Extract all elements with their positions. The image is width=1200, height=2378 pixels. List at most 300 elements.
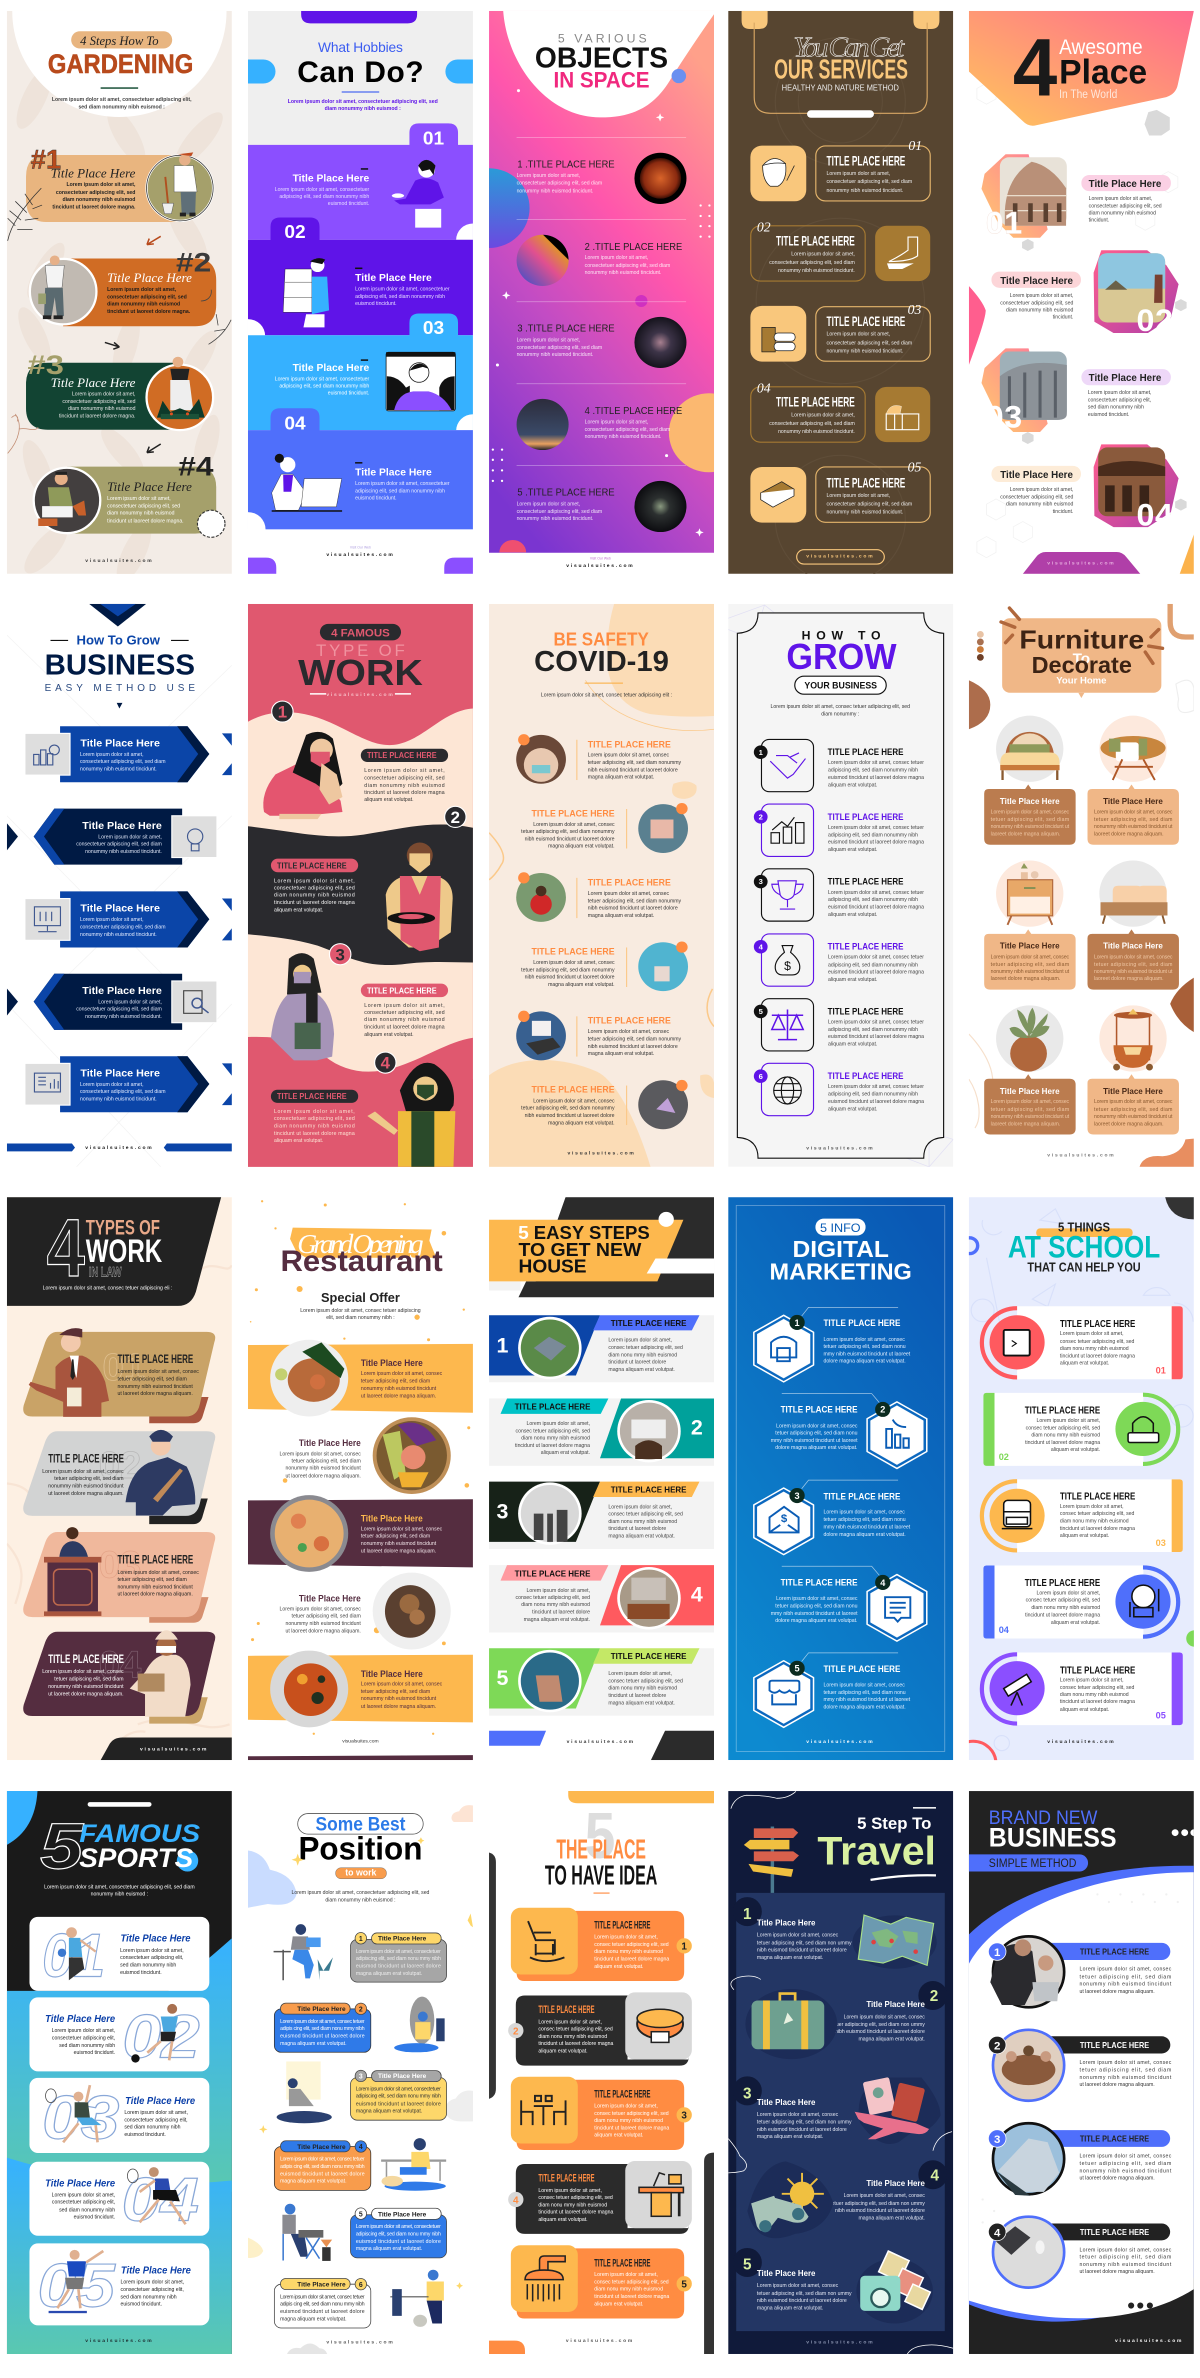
item 2: TITLE PLACE HERE — [277, 862, 347, 870]
sport 1: Lorem ipsum dolor sit amet, — [120, 1948, 184, 1954]
section 03: 03 — [423, 318, 444, 339]
heading: OBJECTS — [535, 43, 668, 75]
item 4 — [271, 1052, 455, 1167]
heading: COVID-19 — [534, 646, 669, 678]
heading — [1001, 608, 1162, 698]
item 2: Lorem ipsum dolor sit amet, — [274, 878, 355, 884]
place 01: consectetuer adipiscing elit, sed — [1089, 203, 1162, 209]
position 1: adipiscing elit, sed diam nonu mmy nibh — [356, 1956, 441, 1962]
step 4: tincidunt ut laoreet dolore — [532, 1610, 590, 1616]
section 04 — [248, 408, 473, 530]
heading — [280, 1228, 443, 1321]
step 1 — [733, 1897, 937, 1969]
panel: restaurant — [248, 1197, 473, 1760]
step 3 — [733, 2076, 941, 2144]
info 1: Lorem ipsum dolor sit amet, consec — [823, 1337, 905, 1343]
item 2 — [988, 2030, 1172, 2101]
sport 4: sed diam nonummy nibh — [59, 2207, 115, 2213]
dish 2: Lorem ipsum dolor sit amet, consec — [280, 1451, 361, 1457]
item 1: Lorem ipsum dolor sit amet, — [80, 752, 144, 758]
idea 5: diam nonu mmy nibh euismod — [594, 2287, 663, 2293]
idea 1: consec tetuer adipiscing elit, sed — [594, 1942, 669, 1948]
item 1: TITLE PLACE HERE — [828, 747, 903, 757]
step 1: 1 — [496, 1334, 509, 1358]
row 1: Lorem ipsum dolor sit amet, consec — [588, 753, 670, 759]
item 1: euismod tincidunt ut laoreet dolore magna — [828, 775, 924, 781]
idea 2: diam nonu mmy nibh euismod — [538, 2034, 607, 2040]
place 01: Title Place Here — [1089, 179, 1162, 190]
step 2: tincidunt ut laoreet dolore magna — [515, 1443, 590, 1449]
thing 4: TITLE PLACE HERE — [1025, 1578, 1100, 1589]
dish 4: Lorem ipsum dolor sit amet, consec — [280, 1606, 361, 1612]
section 01 — [248, 123, 473, 240]
panel: brand new business — [969, 1791, 1197, 2354]
item 4: 4 — [381, 1054, 391, 1073]
step 4: Title Place Here — [866, 2178, 925, 2188]
idea 5: consec tetuer adipiscing elit, sed — [594, 2279, 669, 2285]
heading — [489, 1197, 714, 1297]
item 3: Lorem ipsum dolor sit amet, — [364, 1003, 445, 1009]
heading — [771, 629, 910, 717]
type 3: Lorem ipsum dolor sit amet, consec — [117, 1570, 199, 1576]
thing 3 — [982, 1479, 1183, 1552]
position 6: 6 — [359, 2282, 363, 2289]
idea 5: aliquam erat volutpat. — [594, 2302, 643, 2308]
thing 5: TITLE PLACE HERE — [1060, 1666, 1135, 1676]
panel: our services — [728, 11, 953, 583]
heading — [45, 604, 195, 709]
place 02: Title Place Here — [1000, 276, 1073, 287]
item chair: laoreet dolore magna aliquam. — [1094, 831, 1164, 837]
thing 5: tincidunt ut laoreet dolore magna — [1060, 1699, 1135, 1705]
info 1: dolore magna aliquam erat volutpat. — [823, 1359, 906, 1365]
sport 2: euismod tincidunt. — [74, 2050, 115, 2056]
position 5: Title Place Here — [378, 2211, 427, 2218]
heading — [40, 1810, 200, 1898]
heading: EASY STEPS — [534, 1223, 650, 1244]
row 5: consectetuer adipiscing elit, sed diam — [517, 509, 602, 515]
item 3 — [271, 944, 448, 1060]
step 3: tetuer adipiscing elit, sed diam non ummy — [757, 2120, 852, 2126]
step 5: magna aliquam erat volutpat. — [608, 1700, 675, 1706]
step 4 — [489, 1565, 714, 1633]
panel: awesome place — [969, 11, 1194, 574]
item 3: TITLE PLACE HERE — [827, 314, 905, 329]
type 1: nonummy nibh euismod tincidunt — [117, 1384, 193, 1390]
item 3 — [750, 302, 930, 362]
item 1: tincidunt ut laoreet dolore magna — [364, 790, 445, 796]
idea 5: Lorem ipsum dolor sit amet, — [594, 2272, 658, 2278]
heading: 5 — [518, 1223, 529, 1244]
thing 1: aliquam erat volutpat. — [1060, 1361, 1109, 1367]
dish 2: ut laoreet dolore magna aliquam. — [286, 1474, 361, 1479]
section 03: Lorem ipsum dolor sit amet, consectetuer — [275, 376, 370, 382]
row 5: Lorem ipsum dolor sit amet, — [517, 501, 580, 507]
section 02: adipiscing elit, sed diam nonummy nibh — [355, 294, 445, 300]
footer: visualsuites.com — [567, 1150, 636, 1156]
section 04: Lorem ipsum dolor sit amet, consectetuer — [355, 481, 450, 487]
info 3: Lorem ipsum dolor sit amet, consec — [823, 1510, 905, 1516]
position 2: adipis cing elit, sed diam nonu mmy nibh — [280, 2026, 365, 2032]
step 1: consectetuer adipiscing elit, sed — [56, 190, 135, 196]
sport 5: consectetuer adipiscing elit, — [121, 2287, 184, 2293]
step 4: Title Place Here — [107, 480, 192, 494]
heading: 5 INFO — [820, 1221, 861, 1235]
footer: visualsuites.com — [1047, 1153, 1115, 1159]
step 3: consectetuer adipiscing elit, sed — [62, 399, 136, 405]
section 02: 02 — [284, 222, 306, 243]
item 6: adipiscing elit, sed diam nonummy nibh — [828, 1092, 918, 1098]
dish 4 — [280, 1573, 451, 1649]
row 3: 3 .TITLE PLACE HERE — [517, 324, 615, 334]
type 4: TITLE PLACE HERE — [48, 1652, 124, 1666]
row 3 — [517, 317, 686, 368]
thing 5 — [982, 1652, 1183, 1725]
row 1: TITLE PLACE HERE — [588, 739, 671, 750]
item 4: Lorem ipsum dolor sit amet, — [98, 1000, 162, 1006]
step 1: tincidunt ut laoreet dolore magna. — [52, 204, 136, 210]
sport 5: Title Place Here — [121, 2266, 191, 2277]
item 4: ut laoreet dolore magna aliquam. — [1079, 2269, 1155, 2275]
info 2: tetuer adipiscing elit, sed diam nonu — [775, 1431, 858, 1437]
dish 4: tetuer adipiscing elit, sed diam — [292, 1613, 361, 1619]
idea 1 — [511, 1908, 692, 1981]
heading: BE SAFETY — [554, 630, 649, 651]
section 03: adipiscing elit, sed diam nonummy nibh — [279, 384, 369, 390]
footer: visualsuites.com — [1047, 1739, 1115, 1745]
type 3: TITLE PLACE HERE — [117, 1552, 193, 1566]
item 2: Lorem ipsum dolor sit amet, consec tetuer — [828, 825, 924, 831]
idea 2: aliquam erat volutpat. — [538, 2048, 588, 2054]
heading: OUR SERVICES — [774, 53, 908, 84]
step 4: consectetuer adipiscing elit, sed — [107, 504, 180, 510]
row 2: tetuer adipiscing elit, sed diam nonummy — [521, 829, 615, 835]
item bed: Lorem ipsum dolor sit amet, consec — [991, 810, 1070, 815]
place 01 — [982, 154, 1171, 251]
position 2: Title Place Here — [297, 2006, 346, 2013]
heading: THAT CAN HELP YOU — [1027, 1260, 1141, 1275]
position 3: euismod tincidunt ut laoreet dolore — [356, 2101, 441, 2107]
item 3 — [25, 891, 232, 947]
step 2 — [489, 1398, 714, 1466]
idea 2: tincidunt ut laoreet dolore magna — [538, 2041, 614, 2047]
footer: Visit Our Web — [590, 557, 611, 561]
heading: 5 — [585, 1799, 615, 1872]
item 2: 02 — [757, 220, 771, 234]
step 4: diam nonu mmy nibh euismod — [521, 1602, 590, 1608]
item sofa: tetuer adipiscing elit, sed diam — [1094, 962, 1172, 968]
type 3: tetuer adipiscing elit, sed diam — [117, 1577, 187, 1583]
step 3: diam nonu mmy nibh euismod — [608, 1519, 677, 1525]
position 3: adipiscing elit, sed diam nonu mmy nibh — [356, 2094, 441, 2100]
sport 5: 05 — [37, 2251, 116, 2319]
item 2: Title Place Here — [82, 820, 162, 832]
footer: visualsuites.com — [85, 2338, 153, 2344]
step 5: nibh euismod tincidunt ut laoreet dolore — [757, 2298, 847, 2304]
item 2: tetuer adipiscing elit, sed diam — [1079, 2068, 1171, 2074]
heading: Your Home — [1056, 676, 1106, 687]
sport 4: 04 — [122, 2166, 199, 2233]
footer: visualsuites.com — [140, 1747, 208, 1753]
item 3: consectetuer adipiscing elit, sed diam — [80, 924, 166, 930]
type 4: nonummy nibh euismod tincidunt — [48, 1684, 124, 1690]
item 2: consectetuer adipiscing elit, sed — [274, 886, 355, 892]
idea 1: tincidunt ut laoreet dolore magna — [594, 1956, 669, 1962]
row 4: nibh euismod tincidunt ut laoreet dolore — [525, 975, 615, 981]
item 4: euismod tincidunt ut laoreet dolore magna — [828, 969, 924, 975]
item chair — [1087, 716, 1179, 845]
item 5: TITLE PLACE HERE — [827, 475, 905, 490]
step 4: TITLE PLACE HERE — [515, 1569, 591, 1578]
footer: visualsuites.com — [806, 554, 874, 560]
heading — [744, 1807, 936, 1893]
step 3: 3 — [743, 2085, 752, 2102]
item 1: ut laoreet dolore magna aliquam. — [1079, 1989, 1155, 1995]
dish 3 — [248, 1495, 473, 1572]
item 3: 03 — [908, 302, 922, 317]
type 2: nonummy nibh euismod tincidunt — [48, 1484, 124, 1490]
heading: TYPE OF — [316, 641, 405, 660]
place 01: tincidunt. — [1089, 218, 1109, 224]
row 6: Lorem ipsum dolor sit amet, consec — [533, 1099, 615, 1104]
item 2: adipiscing elit, sed diam nonummy nibh — [828, 832, 918, 838]
idea 4: tincidunt ut laoreet dolore magna — [538, 2210, 614, 2216]
item 1: 1 — [994, 1947, 1001, 1959]
footer: visualsuites.com — [566, 563, 634, 569]
info 5: tetuer adipiscing elit, sed diam nonu — [823, 1690, 906, 1696]
item 3: 3 — [335, 945, 345, 964]
step 2: aliquam erat volutpat. — [541, 1450, 590, 1456]
thing 1: TITLE PLACE HERE — [1060, 1319, 1135, 1330]
step 4: magna aliquam erat volutpat. — [858, 2215, 925, 2221]
thing 2: 02 — [999, 1452, 1009, 1462]
item 2 — [271, 806, 466, 951]
place 03: sed diam nonummy nibh — [1088, 405, 1144, 411]
step 3 — [489, 1482, 714, 1549]
step 1: tetuer adipiscing elit, sed diam non ummy — [757, 1940, 852, 1946]
section 04: Title Place Here — [355, 468, 432, 479]
item 1: consectetuer adipiscing elit, sed diam — [827, 179, 912, 185]
thing 1: diam nonu mmy nibh euismod — [1060, 1346, 1129, 1352]
sport 1: 01 — [42, 1922, 105, 1989]
item 4: Lorem ipsum dolor sit amet, consec tetuer — [828, 955, 924, 961]
idea 4: TITLE PLACE HERE — [538, 2173, 595, 2185]
item 2: nonummy nibh euismod tincidunt. — [85, 849, 162, 855]
step 3: consec tetuer adipiscing elit, sed — [608, 1512, 683, 1517]
idea 4: aliquam erat volutpat. — [538, 2217, 588, 2223]
heading: Grand Opening — [297, 1229, 424, 1259]
heading: Lorem ipsum dolor sit amet, consec tetuer adipiscing elit, sed — [771, 704, 910, 710]
heading: sed diam nonummy nibh euismod : — [78, 104, 165, 110]
heading: What Hobbies — [318, 40, 403, 55]
thing 1: Lorem ipsum dolor sit amet, — [1060, 1331, 1124, 1337]
position 1: magna aliquam erat volutpat. — [356, 1971, 422, 1977]
item 1: aliquam erat volutpat. — [364, 797, 414, 803]
idea 3: TITLE PLACE HERE — [594, 2088, 651, 2100]
item 2: Lorem ipsum dolor sit amet, — [98, 834, 162, 840]
idea 1: diam nonu mmy nibh euismod — [594, 1949, 663, 1955]
heading: Some Best — [315, 1815, 406, 1836]
info 1: TITLE PLACE HERE — [823, 1318, 900, 1328]
info 5: Lorem ipsum dolor sit amet, consec — [823, 1683, 905, 1689]
footer — [101, 1737, 232, 1760]
step 3: tincidunt ut laoreet dolore — [608, 1526, 666, 1532]
idea 1: Lorem ipsum dolor sit amet, — [594, 1935, 658, 1941]
step 3: nibh euismod tincidunt ut laoreet dolore — [757, 2127, 847, 2133]
item 6: TITLE PLACE HERE — [828, 1071, 903, 1081]
row 4: TITLE PLACE HERE — [532, 947, 615, 958]
heading: BUSINESS — [989, 1823, 1117, 1853]
step 1: Title Place Here — [757, 1918, 816, 1928]
footer: visualsuites.com — [85, 1145, 153, 1151]
item 3: tetuer adipiscing elit, sed diam — [1079, 2161, 1171, 2167]
step 3: Title Place Here — [757, 2097, 816, 2107]
item 5 — [25, 1056, 232, 1112]
step 2: magna aliquam erat volutpat. — [858, 2036, 925, 2042]
dish 5 — [248, 1651, 473, 1727]
type 4 — [23, 1630, 215, 1724]
step 5 — [733, 2248, 933, 2323]
panel: types of work — [7, 1197, 232, 1760]
item bed: tetuer adipiscing elit, sed diam — [991, 817, 1069, 823]
dish 1 — [248, 1340, 473, 1417]
row 2: TITLE PLACE HERE — [532, 809, 615, 819]
step 4: tincidunt ut laoreet dolore magna. — [107, 518, 184, 524]
idea 3: diam nonu mmy nibh euismod — [594, 2118, 663, 2124]
heading: GARDENING — [48, 48, 193, 79]
step 3: magna aliquam erat volutpat. — [757, 2134, 823, 2140]
item 5: aliquam erat volutpat. — [828, 1042, 877, 1048]
row 1: tetuer adipiscing elit, sed diam nonummy — [588, 760, 682, 766]
section 04: euismod tincidunt. — [355, 496, 397, 502]
step 2: Lorem ipsum dolor sit amet, — [526, 1421, 590, 1427]
item 2: tincidunt ut laoreet dolore magna — [274, 900, 355, 906]
place 02: tincidunt. — [1053, 315, 1073, 321]
info 3: 3 — [795, 1491, 800, 1501]
item 3 — [754, 869, 924, 921]
idea 1: aliquam erat volutpat. — [594, 1964, 643, 1970]
thing 5: aliquam erat volutpat. — [1060, 1707, 1109, 1713]
place 04 — [991, 444, 1187, 533]
panel: the place — [489, 1791, 714, 2354]
item 1: adipiscing elit, sed diam nonummy nibh — [828, 768, 918, 774]
item 6: aliquam erat volutpat. — [828, 1106, 877, 1112]
place 04: 04 — [1136, 497, 1173, 533]
position 5: magna aliquam erat volutpat. — [356, 2246, 422, 2252]
place 04: tincidunt. — [1053, 509, 1073, 515]
footer: visualsuites.com — [806, 1146, 874, 1152]
step 4: #4 — [178, 451, 214, 482]
item 4 — [7, 974, 217, 1030]
heading: MARKETING — [770, 1259, 912, 1285]
heading: diam nonummy nibh euismod : — [325, 106, 401, 112]
step 3: Lorem ipsum dolor sit amet, consec — [757, 2112, 839, 2118]
info 5: mmy nibh euismod tincidunt ut laoreet — [823, 1697, 911, 1703]
thing 2: consec tetuer adipiscing elit, sed — [1026, 1425, 1100, 1431]
item 5: nonummy nibh euismod tincidunt. — [80, 1097, 157, 1103]
step 1: tincidunt ut laoreet dolore — [608, 1359, 666, 1365]
idea 4 — [508, 2161, 692, 2234]
sport 3: euismod tincidunt. — [124, 2132, 166, 2138]
position 1: 1 — [359, 1936, 363, 1943]
info 4: dolore magna aliquam erat volutpat. — [775, 1618, 858, 1624]
panel: type of work — [248, 604, 473, 1167]
item 4: Lorem ipsum dolor sit amet, consec — [1079, 2247, 1172, 2253]
item 1: Lorem ipsum dolor sit amet, consec — [1079, 1967, 1172, 1973]
step 1: consec tetuer adipiscing elit, sed — [608, 1345, 683, 1351]
dish 4: Title Place Here — [299, 1593, 361, 1603]
step 3: tincidunt ut laoreet dolore magna. — [59, 414, 135, 420]
step 1: 1 — [743, 1906, 752, 1923]
row 4: consectetuer adipiscing elit, sed diam — [585, 427, 670, 433]
item 5: 05 — [908, 460, 922, 474]
type 1: Lorem ipsum dolor sit amet, consec — [117, 1369, 199, 1375]
idea 3: tincidunt ut laoreet dolore magna — [594, 2125, 669, 2131]
item 1: nonummy nibh euismod tincidunt. — [827, 188, 903, 194]
heading: FAMOUS — [79, 1820, 200, 1848]
info 3: TITLE PLACE HERE — [823, 1491, 900, 1501]
item 3: nonummy nibh euismod tincidunt — [1079, 2168, 1172, 2174]
heading: GROW — [786, 636, 897, 677]
idea 4: diam nonu mmy nibh euismod — [538, 2202, 607, 2208]
step 2: 2 — [930, 1988, 938, 2005]
heading: Decorate — [1032, 652, 1132, 678]
row 3: TITLE PLACE HERE — [588, 877, 671, 888]
sport 5: sed diam nonummy nibh — [121, 2294, 177, 2300]
section 01: euismod tincidunt. — [328, 201, 369, 207]
item 2: Lorem ipsum dolor sit amet, consec — [1079, 2060, 1172, 2066]
thing 2 — [983, 1393, 1178, 1466]
position 1: euismod tincidunt ut laoreet dolore — [356, 1963, 441, 1969]
heading: Lorem ipsum dolor sit amet, consectetuer adipiscing elit, sed diam — [44, 1884, 195, 1890]
row 2: magna aliquam erat volutpat. — [548, 844, 615, 850]
idea 3: consec tetuer adipiscing elit, sed — [594, 2111, 669, 2117]
heading: 5 VARIOUS — [558, 32, 647, 45]
heading: Lorem ipsum dolor sit amet, consectetuer adipiscing elit, sed — [291, 1890, 430, 1896]
info 1: 1 — [795, 1318, 800, 1328]
position 4: magna aliquam erat volutpat. — [280, 2179, 347, 2185]
item 5: euismod tincidunt ut laoreet dolore magna — [828, 1034, 924, 1040]
place 02: diam nonummy nibh euismod — [1006, 308, 1073, 314]
step 2 — [30, 247, 231, 344]
sport 4: consectetuer adipiscing elit, — [52, 2200, 115, 2206]
position 2: Lorem ipsum dolor sit amet, consec tetuer — [280, 2019, 365, 2025]
panel: furniture — [969, 604, 1194, 1167]
dish 5: Lorem ipsum dolor sit amet, consec — [361, 1682, 443, 1688]
item 3: euismod tincidunt ut laoreet dolore magna — [828, 905, 924, 911]
idea 4: 4 — [513, 2195, 519, 2206]
item bed: Title Place Here — [1000, 796, 1060, 806]
thing 4: consec tetuer adipiscing elit, sed — [1026, 1598, 1100, 1604]
dish 1: Title Place Here — [361, 1358, 423, 1368]
item 2: Lorem ipsum dolor sit amet, — [791, 252, 855, 257]
idea 4: Lorem ipsum dolor sit amet, — [538, 2188, 602, 2194]
type 1: tetuer adipiscing elit, sed diam — [117, 1376, 187, 1382]
sport 1: euismod tincidunt. — [120, 1970, 162, 1976]
heading — [7, 1197, 221, 1306]
footer — [248, 529, 473, 574]
item 4: Lorem ipsum dolor sit amet, — [791, 413, 855, 419]
idea 5 — [511, 2245, 692, 2319]
item 4: nonummy nibh euismod tincidunt. — [778, 429, 855, 435]
item trolley: Lorem ipsum dolor sit amet, consec — [1094, 1099, 1173, 1105]
section 01: Title Place Here — [293, 173, 370, 184]
step 1: Lorem ipsum dolor sit amet, consec — [757, 1933, 839, 1939]
item cabinet: tetuer adipiscing elit, sed diam — [991, 962, 1069, 968]
item 5: TITLE PLACE HERE — [828, 1007, 903, 1016]
dish 5: nonummy nibh euismod tincidunt — [361, 1696, 437, 1702]
step 3: Lorem ipsum dolor sit amet, — [72, 392, 135, 397]
